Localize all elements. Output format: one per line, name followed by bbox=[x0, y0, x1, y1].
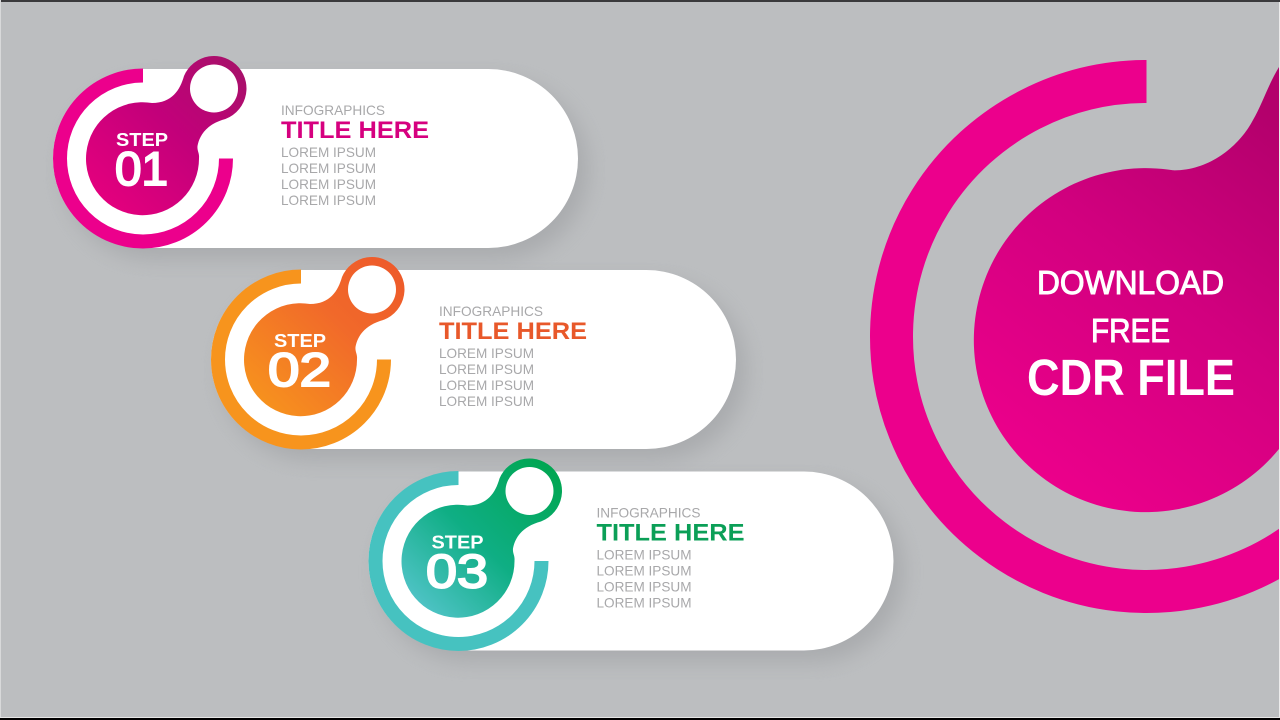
title: TITLE HERE bbox=[281, 117, 429, 144]
step 1 card bbox=[53, 56, 588, 259]
ring bbox=[60, 76, 226, 241]
download line: DOWNLOAD bbox=[1037, 264, 1224, 301]
step number: 03 bbox=[426, 544, 488, 598]
step label: STEP bbox=[432, 532, 484, 552]
body text: LOREM IPSUM bbox=[596, 562, 692, 578]
body text: LOREM IPSUM bbox=[439, 393, 534, 409]
step number: 02 bbox=[268, 343, 331, 396]
step label: STEP bbox=[116, 130, 168, 150]
eyebrow: INFOGRAPHICS bbox=[439, 303, 543, 319]
card shadow bbox=[221, 281, 746, 460]
ring bbox=[218, 276, 384, 442]
step number: 01 bbox=[115, 142, 168, 195]
body text: LOREM IPSUM bbox=[439, 377, 534, 393]
ring bbox=[376, 478, 542, 644]
card shadow bbox=[63, 80, 588, 259]
badge hole bbox=[190, 64, 238, 112]
title: TITLE HERE bbox=[596, 520, 744, 546]
badge blob bbox=[86, 56, 247, 215]
free line: FREE bbox=[1091, 312, 1170, 349]
body text: LOREM IPSUM bbox=[596, 578, 692, 594]
white pill panel bbox=[211, 270, 736, 449]
badge hole bbox=[348, 266, 396, 314]
body text: LOREM IPSUM bbox=[596, 594, 692, 610]
body text: LOREM IPSUM bbox=[281, 160, 376, 176]
body text: LOREM IPSUM bbox=[281, 176, 376, 192]
title: TITLE HERE bbox=[439, 318, 587, 345]
card shadow bbox=[378, 482, 904, 662]
badge blob bbox=[402, 458, 562, 618]
body text: LOREM IPSUM bbox=[281, 144, 376, 160]
eyebrow: INFOGRAPHICS bbox=[281, 102, 385, 118]
badge hole bbox=[506, 467, 554, 515]
body text: LOREM IPSUM bbox=[596, 546, 692, 562]
body text: LOREM IPSUM bbox=[281, 192, 376, 208]
white pill panel bbox=[53, 69, 578, 248]
eyebrow: INFOGRAPHICS bbox=[596, 504, 700, 520]
body text: LOREM IPSUM bbox=[439, 361, 534, 377]
step 2 card bbox=[211, 257, 746, 460]
large blob bbox=[974, 67, 1279, 512]
badge blob bbox=[244, 257, 404, 416]
body text bbox=[439, 345, 534, 409]
download call to action bbox=[1027, 264, 1235, 406]
cdr file line: CDR FILE bbox=[1027, 349, 1235, 406]
step 3 card bbox=[368, 458, 904, 662]
large ring bbox=[892, 82, 1280, 592]
step label: STEP bbox=[274, 331, 326, 351]
white pill panel bbox=[368, 472, 894, 650]
body text bbox=[596, 546, 692, 610]
body text bbox=[281, 144, 376, 208]
body text: LOREM IPSUM bbox=[439, 345, 534, 361]
